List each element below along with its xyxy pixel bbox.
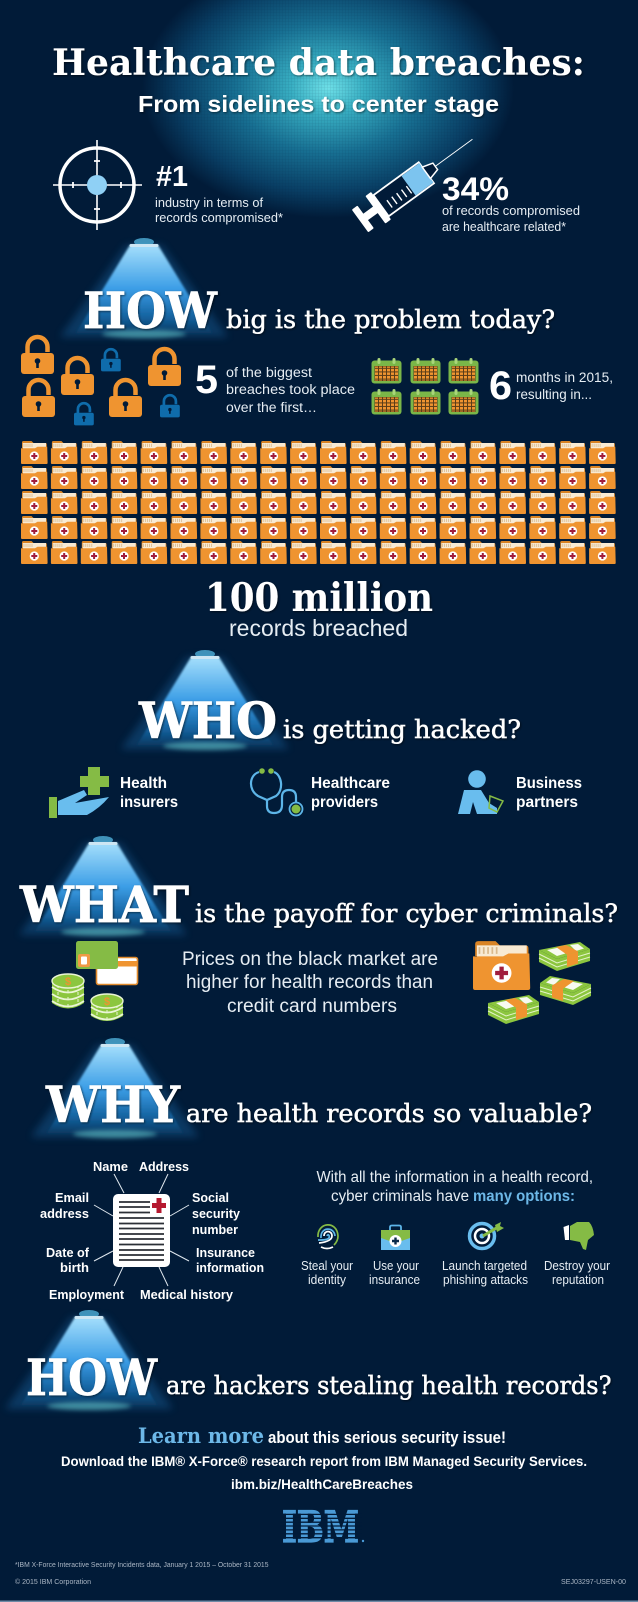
stat: 34%: [442, 171, 580, 234]
labels: record contents: Address: [139, 1159, 189, 1174]
labels: record contents: Social: [192, 1190, 229, 1205]
label: health insurers: insurers: [120, 794, 178, 811]
captions: options: Destroy your: [544, 1259, 610, 1273]
labels: record contents: security: [192, 1206, 241, 1221]
panel: who is getting hacked: [49, 650, 582, 818]
captions: options: Launch targeted: [442, 1259, 527, 1273]
stat: 6 months: resulting in...: [516, 387, 592, 402]
stat: 5 biggest breaches: breaches took place: [226, 382, 355, 397]
text: black market prices: higher for health records than: [186, 972, 433, 993]
labels: record contents: birth: [60, 1260, 89, 1275]
text: many options: With all the information in a health record,: [316, 1169, 593, 1186]
text: black market prices: [182, 949, 438, 1017]
call to action: Learn more: [138, 1423, 264, 1448]
captions: options: phishing attacks: [443, 1273, 528, 1287]
heading: HOW hackers: are hackers stealing health records?: [166, 1371, 612, 1400]
stat: 6 months: months in 2015,: [516, 370, 613, 385]
text: black market prices: credit card numbers: [227, 996, 397, 1017]
label: business partners: partners: [516, 794, 578, 811]
labels: record contents: Medical history: [140, 1287, 234, 1302]
logo: IBM: IBM: [282, 1503, 359, 1553]
icon: stethoscope: [251, 768, 302, 816]
text: many options: many options:: [473, 1188, 575, 1205]
text: many options: [316, 1169, 593, 1205]
icon: business partner: [458, 770, 503, 814]
icon: spotlight: [31, 1038, 199, 1138]
heading: WHAT: WHAT: [19, 875, 189, 934]
labels: record contents: Email: [55, 1190, 89, 1205]
stat: 5 biggest breaches: over the first…: [226, 400, 317, 415]
heading: HOW big: big is the problem today?: [226, 305, 555, 334]
labels: record contents: number: [192, 1222, 238, 1237]
icon: padlocks: [21, 337, 181, 425]
icon: money bundles: [488, 942, 591, 1024]
icon: coin stack large: [52, 974, 84, 1008]
panel: header: [52, 42, 585, 235]
heading: HOW big: HOW: [83, 281, 218, 340]
heading: WHY: are health records so valuable?: [186, 1099, 592, 1128]
stat: #1: industry in terms of: [155, 196, 264, 210]
call to action: [61, 1423, 587, 1492]
heading: HOW hackers: HOW: [26, 1348, 158, 1407]
stat: 34%: are healthcare related*: [442, 220, 566, 234]
icon: syringe: [350, 126, 482, 235]
captions: options: Steal your: [301, 1259, 353, 1273]
labels: record contents: Employment: [49, 1287, 125, 1302]
title: Healthcare data breaches:: [52, 42, 585, 84]
label: health insurers: [120, 775, 178, 811]
icon: calendars: [372, 358, 478, 414]
icon: coin stack small: [91, 994, 123, 1021]
label: business partners: Business: [516, 775, 582, 792]
heading: WHAT: is the payoff for cyber criminals?: [195, 899, 618, 928]
icon: spotlight: [5, 1310, 173, 1410]
stat: 6 months: [489, 364, 613, 408]
call to action: about this serious security issue!: [268, 1429, 506, 1447]
icon: spotlight: [60, 238, 228, 338]
captions: options: identity: [308, 1273, 347, 1287]
icon: coin stack large: $: [65, 976, 71, 988]
stat: #1: [155, 161, 283, 225]
heading: HOW big: [83, 281, 555, 340]
panel: how big is the problem: [21, 238, 616, 641]
stat: 34%: of records compromised: [442, 204, 580, 218]
labels: record contents: Date of: [46, 1245, 90, 1260]
stat: 34%: 34%: [442, 171, 509, 207]
label: business partners: [516, 775, 582, 811]
icon: target with dart: [470, 1222, 504, 1248]
labels: record contents: information: [196, 1260, 264, 1275]
stat: #1: records compromised*: [155, 211, 283, 225]
decorative top glow: [142, 0, 514, 218]
icon: spotlight: [19, 836, 187, 936]
captions: options: insurance: [369, 1273, 420, 1287]
stat: 5 biggest breaches: [195, 358, 355, 415]
icon grid: folders: [21, 441, 616, 564]
label: healthcare providers: providers: [311, 794, 378, 811]
icon: coin stack small: $: [104, 996, 110, 1008]
text: many options: cyber criminals have: [331, 1188, 469, 1205]
labels: record contents: Insurance: [196, 1245, 255, 1260]
labels: record contents: Name: [93, 1159, 128, 1174]
label: health insurers: Health: [120, 775, 167, 792]
captions: options: reputation: [552, 1273, 604, 1287]
stat: 100 million records: records breached: [229, 615, 408, 641]
panel: why are health records valuable: [31, 1038, 610, 1302]
label: healthcare providers: Healthcare: [311, 775, 390, 792]
connector lines: [94, 1174, 189, 1286]
stat: 100 million records: 100 million: [205, 575, 433, 621]
heading: WHO: [138, 691, 521, 750]
heading: WHO: WHO: [138, 691, 277, 750]
call to action: Download the IBM® X-Force® research report from IBM Managed Security Services.: [61, 1454, 587, 1469]
icon: medical kit: [381, 1226, 410, 1250]
heading: WHO: is getting hacked?: [283, 715, 521, 744]
label: healthcare providers: [311, 775, 390, 811]
labels: record contents: [40, 1159, 264, 1302]
icon: thumbs down: [564, 1222, 594, 1250]
stat: 5 biggest breaches: 5: [195, 358, 218, 402]
panel: what is the payoff: [19, 836, 618, 1024]
stat: #1: #1: [156, 161, 188, 193]
icon: spotlight: [121, 650, 289, 750]
document code: SEJ03297-USEN-00: [561, 1579, 626, 1586]
stat: 6 months: 6: [489, 364, 512, 408]
footnote: *IBM X-Force Interactive Security Incidents data, January 1 2015 – October 31 2015: [15, 1562, 269, 1569]
heading: WHY: WHY: [45, 1075, 181, 1134]
icon: credit cards: [76, 941, 138, 984]
icon: fingerprint: [318, 1225, 338, 1248]
icon: medical folder: [473, 941, 530, 990]
heading: WHY: [45, 1075, 592, 1134]
stat: 100 million records: [205, 575, 433, 641]
subtitle: From sidelines to center stage: [138, 91, 499, 117]
icon: health record document: [113, 1194, 170, 1267]
captions: options: [301, 1259, 610, 1287]
heading: WHAT: [19, 875, 618, 934]
copyright: © 2015 IBM Corporation: [15, 1578, 91, 1586]
heading: HOW hackers: [26, 1348, 612, 1407]
call to action: ibm.biz/HealthCareBreaches: [231, 1477, 413, 1492]
panel: how are hackers stealing: [5, 1310, 626, 1586]
captions: options: Use your: [373, 1259, 419, 1273]
labels: record contents: address: [40, 1206, 89, 1221]
stat: 5 biggest breaches: of the biggest: [226, 365, 312, 380]
icon: crosshair target: [53, 140, 142, 230]
text: black market prices: Prices on the black market are: [182, 949, 438, 970]
icon: insurer hand: [49, 767, 109, 818]
